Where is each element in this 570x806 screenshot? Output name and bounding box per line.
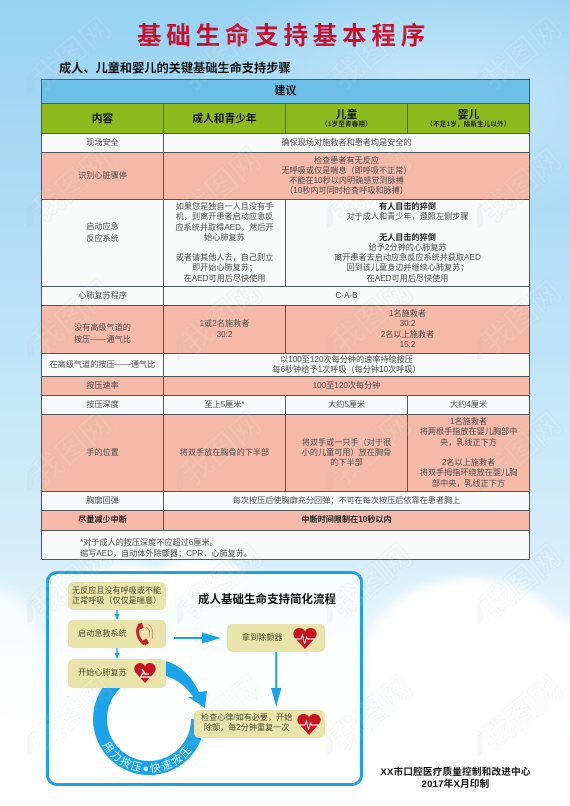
table: basic life support steps: 大约5厘米 <box>328 400 365 409</box>
table: basic life support steps: C-A-B <box>335 291 358 300</box>
table: basic life support steps: 有人目击的猝倒 <box>379 202 436 211</box>
row: recognize cardiac arrest: 识别心脏骤停 <box>78 171 127 180</box>
row: ratio with advanced airway: 在高级气道的按压——通气比 <box>50 360 155 369</box>
row: ratio with advanced airway <box>42 354 164 377</box>
table: basic life support steps <box>41 79 530 559</box>
flow box: activate emergency system: 启动急救系统 <box>78 629 127 638</box>
flow box: check rhythm: 检查心律/如有必要，开始 <box>201 713 292 722</box>
table: basic life support steps: 至上5厘米* <box>204 400 245 409</box>
compression cycle ring: 用力按压●快速按压 <box>102 741 192 773</box>
table: basic life support steps: （10秒内可同时检查呼吸和脉搏） <box>285 186 408 195</box>
flow box: unresponsive: 正常呼吸（仅仅是喘息） <box>72 596 161 605</box>
table: basic life support steps: 检查患者有无反应 <box>314 156 379 165</box>
flow box: get defibrillator: 拿到除颤器 <box>242 633 282 642</box>
table: basic life support steps: 2名以上施救者 <box>381 330 434 338</box>
table: basic life support steps: 将双手放在胸骨的下半部 <box>180 448 269 457</box>
column header: adult: 成人和青少年 <box>192 112 257 124</box>
footer: issuing organisation: XX市口腔医疗质量控制和改进中心 <box>380 767 531 778</box>
row: minimize interruptions: 尽量减少中断 <box>78 515 127 524</box>
table: basic life support steps: 小的儿童可用）放在胸骨 <box>302 448 391 457</box>
row: recognize cardiac arrest <box>42 153 164 200</box>
table banner: 建议 <box>274 85 296 97</box>
row: compression depth <box>42 396 164 415</box>
row: activate emergency response: 反应系统 <box>86 234 119 242</box>
table: basic life support steps: 15:2 <box>400 340 415 349</box>
table: basic life support steps: 每次按压后使胸廓充分回弹；不可在每次按压后依靠在患者胸上 <box>233 496 460 505</box>
table: basic life support steps: 在AED可用后尽快使用 <box>184 274 265 283</box>
row: compression rate: 按压速率 <box>86 381 119 390</box>
arrow: step 2 to step 3 <box>114 648 120 659</box>
table: basic life support steps: 确保现场对施救者和患者均是安全的 <box>281 138 412 147</box>
table: basic life support steps: 在AED可用后尽快使用 <box>367 274 448 283</box>
footnote: *对于成人的按压深度不应超过6厘米。 <box>80 538 218 546</box>
column header: child: （1岁至青春期） <box>321 120 372 128</box>
table: basic life support steps: 部中央，乳线正下方 <box>432 478 505 488</box>
table: basic life support steps: 或者请其他人去，自己则立 <box>176 253 273 262</box>
icon: heart with ECG <box>297 714 321 735</box>
table: basic life support steps: 30:2 <box>400 319 415 328</box>
title: 基础生命支持基本程序 <box>137 23 430 50</box>
row: ratio without advanced airway <box>42 306 164 354</box>
column header: child <box>286 104 408 134</box>
table: basic life support steps: 无呼吸或仅是喘息（即呼吸不正常） <box>281 166 412 175</box>
arrow: step 1 to step 2 <box>114 610 120 620</box>
row: minimize interruptions <box>42 511 164 531</box>
table: basic life support steps: 将双手或一只手（对于很 <box>302 438 391 447</box>
table: basic life support steps: 将两根手指放在婴儿胸部中 <box>420 427 517 436</box>
table: basic life support steps: 如果您是独自一人且没有手 <box>176 202 273 211</box>
subtitle: 成人、儿童和婴儿的关键基础生命支持步骤 <box>59 61 291 75</box>
table: basic life support steps: 给予2分钟的心肺复苏 <box>369 243 446 252</box>
table: basic life support steps: 即开始心肺复苏； <box>192 263 257 272</box>
table: basic life support steps: 央，乳线正下方 <box>440 438 497 447</box>
column header: content <box>42 104 164 134</box>
table: basic life support steps: 将双手拇指环绕放在婴儿胸 <box>420 468 517 477</box>
table: basic life support steps: 的下半部 <box>330 458 363 467</box>
column header: infant: 婴儿 <box>458 108 479 120</box>
table: basic life support steps: 以100至120次每分钟的速率持续按压 <box>280 355 413 364</box>
column header: infant <box>408 104 530 134</box>
footnote <box>42 531 530 560</box>
panel: simplified adult BLS flow <box>46 571 363 786</box>
flow box: check rhythm: 除颤，每2分钟重复一次 <box>204 723 289 732</box>
row: CPR sequence <box>42 287 164 306</box>
column header: adult <box>164 104 286 134</box>
row: compression depth: 按压深度 <box>86 400 119 409</box>
icon: heart with CPR figure <box>134 663 156 683</box>
table: basic life support steps: 不能在10秒以内明确感觉到脉搏 <box>289 176 404 185</box>
icon: telephone <box>136 622 154 646</box>
arrow: to defibrillator <box>174 632 221 644</box>
flow box: start CPR <box>68 659 166 688</box>
flow box: check rhythm <box>194 710 325 738</box>
column header: content: 内容 <box>92 112 113 124</box>
row: compression rate <box>42 377 164 396</box>
flow box: start CPR: 开始心肺复苏 <box>78 668 127 677</box>
row: hand placement: 手的位置 <box>86 448 119 457</box>
flow box: unresponsive <box>68 582 166 610</box>
row: ratio without advanced airway: 没有高级气道的 <box>74 322 131 332</box>
table: basic life support steps: 回到该儿童身边并继续心肺复苏； <box>347 263 468 272</box>
footer: issuing organisation: 2017年X月印制 <box>422 778 489 790</box>
row: scene safety: 现场安全 <box>86 138 119 147</box>
table: basic life support steps: 每6秒钟给予1次呼吸（每分钟10次呼吸） <box>272 365 421 374</box>
compression cycle ring <box>93 661 207 775</box>
icon: heart with ECG <box>293 628 317 649</box>
arrow: defibrillator to rhythm check <box>271 652 281 707</box>
row: ratio without advanced airway: 按压——通气比 <box>74 334 131 344</box>
row: chest recoil: 胸廓回弹 <box>86 496 119 505</box>
row: scene safety <box>42 134 164 153</box>
table: basic life support steps: 1名施救者 <box>389 309 426 318</box>
footer: issuing organisation <box>380 766 531 790</box>
table: basic life support steps: 大约4厘米 <box>450 400 487 409</box>
row: chest recoil <box>42 492 164 511</box>
table: basic life support steps: 1名施救者 <box>450 417 487 426</box>
row: CPR sequence: 心肺复苏程序 <box>78 291 127 300</box>
table: basic life support steps: 应系统并取得AED，然后开 <box>176 223 273 232</box>
table: basic life support steps: 中断时间限制在10秒以内 <box>301 515 392 524</box>
column header: infant: （不足1岁，除新生儿以外） <box>426 120 511 128</box>
column header: child: 儿童 <box>336 108 357 120</box>
table: basic life support steps: 机，则离开患者启动应急反 <box>176 212 273 221</box>
flow box: unresponsive: 无反应且没有呼吸或不能 <box>72 586 161 595</box>
table banner <box>42 80 530 104</box>
flow title: 成人基础生命支持简化流程 <box>198 594 336 606</box>
row: hand placement <box>42 415 164 492</box>
row: activate emergency response <box>42 200 164 287</box>
flow box: activate emergency system <box>68 620 166 648</box>
row: activate emergency response: 启动应急 <box>86 222 119 230</box>
table: basic life support steps: 100至120次每分钟 <box>313 381 380 390</box>
flow box: get defibrillator <box>227 624 325 652</box>
table: basic life support steps: 30:2 <box>217 330 232 338</box>
footnote: 缩写AED，自动体外除颤器；CPR，心肺复苏。 <box>80 548 252 558</box>
table: basic life support steps: 2名以上施救者 <box>442 458 495 467</box>
table: basic life support steps: 始心肺复苏 <box>204 233 245 242</box>
table: basic life support steps: 无人目击的猝倒 <box>379 233 436 242</box>
table: basic life support steps: 1或2名施救者 <box>200 319 249 328</box>
table: basic life support steps: 离开患者去启动应急反应系统并获取AED <box>334 253 481 262</box>
table: basic life support steps: 对于成人和青少年，遵照左侧步骤 <box>347 212 468 221</box>
